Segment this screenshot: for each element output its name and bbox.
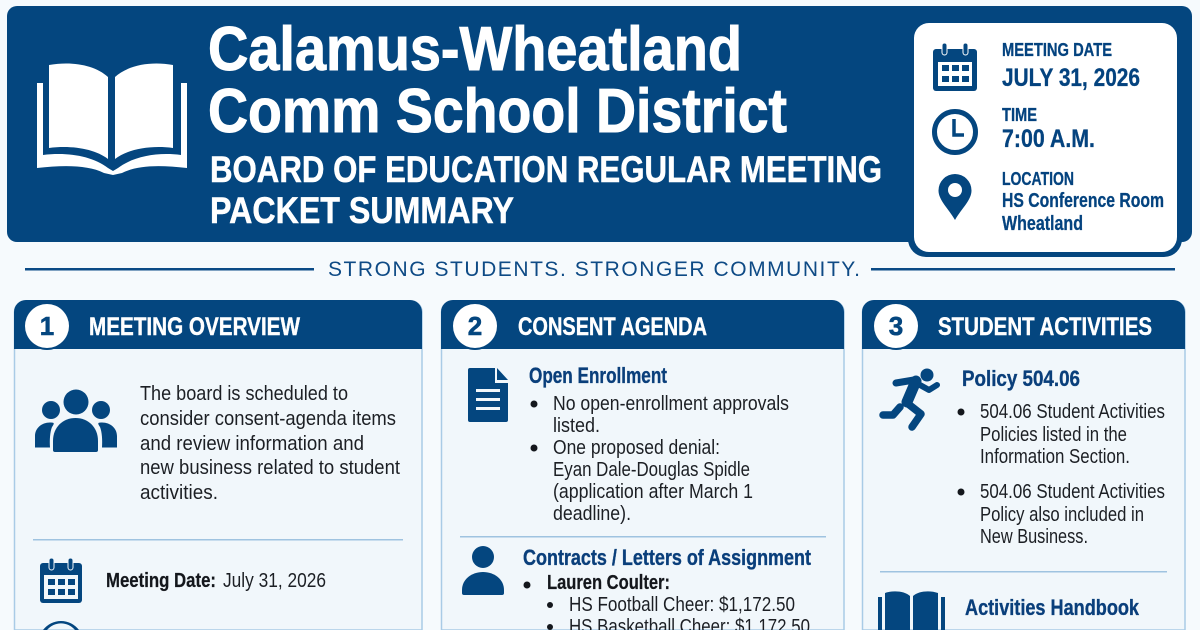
open enrollment list: Eyan Dale-Douglas Spidle [553,459,750,481]
policy list: New Business. [980,526,1088,548]
meeting date row: Meeting Date: [106,570,216,592]
overview description: The board is scheduled to [140,383,348,405]
text: time: 7:00 A.M. [1002,125,1095,153]
subtitle: BOARD OF EDUCATION REGULAR MEETING [210,149,882,190]
contracts heading: Contracts / Letters of Assignment [523,545,812,570]
panel heading: STUDENT ACTIVITIES [938,313,1152,341]
text: meeting date: MEETING DATE [1002,40,1112,60]
subtitle: PACKET SUMMARY [210,190,514,231]
policy list [958,401,1165,548]
open enrollment list: (application after March 1 [553,481,753,503]
icon: location pin [938,174,972,220]
icon: calendar [40,558,82,603]
open enrollment list: No open-enrollment approvals [553,393,789,415]
panel: meeting overview [14,300,422,630]
meeting details card [908,20,1182,257]
icon: clock [43,621,79,630]
title: Calamus-Wheatland [208,15,742,84]
title: Comm School District [208,77,787,146]
text: time: TIME [1002,105,1037,125]
panel heading: MEETING OVERVIEW [89,313,300,341]
text: location: LOCATION [1002,169,1074,189]
text: meeting date: JULY 31, 2026 [1002,64,1140,92]
panel heading: CONSENT AGENDA [518,313,707,341]
panel: student activities [862,300,1185,630]
open enrollment list: listed. [553,415,600,437]
policy list: Information Section. [980,446,1130,468]
icon: runner [883,368,937,427]
subtitle [210,149,882,231]
text: location: Wheatland [1002,213,1083,235]
overview description: and review information and [140,433,364,455]
icon: people [35,390,117,452]
number badge 3: 3 [889,311,903,341]
icon: clock [934,112,976,152]
tagline: STRONG STUDENTS. STRONGER COMMUNITY. [328,258,860,281]
open enrollment list [530,393,789,525]
text: location [1002,169,1164,235]
text: meeting date [1002,40,1140,92]
text: time [1002,105,1095,153]
icon: calendar [933,43,977,91]
icon: document [468,368,508,422]
number badge 3 [873,304,919,350]
contracts list [524,572,810,630]
panel: consent agenda [441,300,844,630]
overview description: consider consent-agenda items [140,408,396,430]
policy heading: Policy 504.06 [962,366,1080,391]
meeting date row: July 31, 2026 [223,570,326,592]
overview description: activities. [140,482,218,504]
contracts list: HS Football Cheer: $1,172.50 [569,594,795,616]
open enrollment heading: Open Enrollment [529,363,668,388]
number badge 2: 2 [468,311,482,341]
icon: open book [37,64,187,175]
open enrollment list: deadline). [553,503,631,525]
open enrollment list: One proposed denial: [553,437,720,459]
header banner [7,6,1192,257]
overview description: new business related to student [140,457,400,479]
handbook heading: Activities Handbook [965,595,1140,620]
overview description [140,383,400,504]
number badge 1: 1 [40,311,54,341]
contracts list: Lauren Coulter: [547,572,670,594]
icon: person [462,546,504,595]
number badge 1 [24,304,70,350]
icon: handbook [878,591,945,630]
policy list: Policies listed in the [980,424,1127,446]
policy list: Policy also included in [980,504,1144,526]
number badge 2 [452,304,498,350]
policy list: 504.06 Student Activities [980,401,1165,423]
policy list: 504.06 Student Activities [980,481,1165,503]
meeting date row [106,570,326,592]
title [208,15,787,146]
